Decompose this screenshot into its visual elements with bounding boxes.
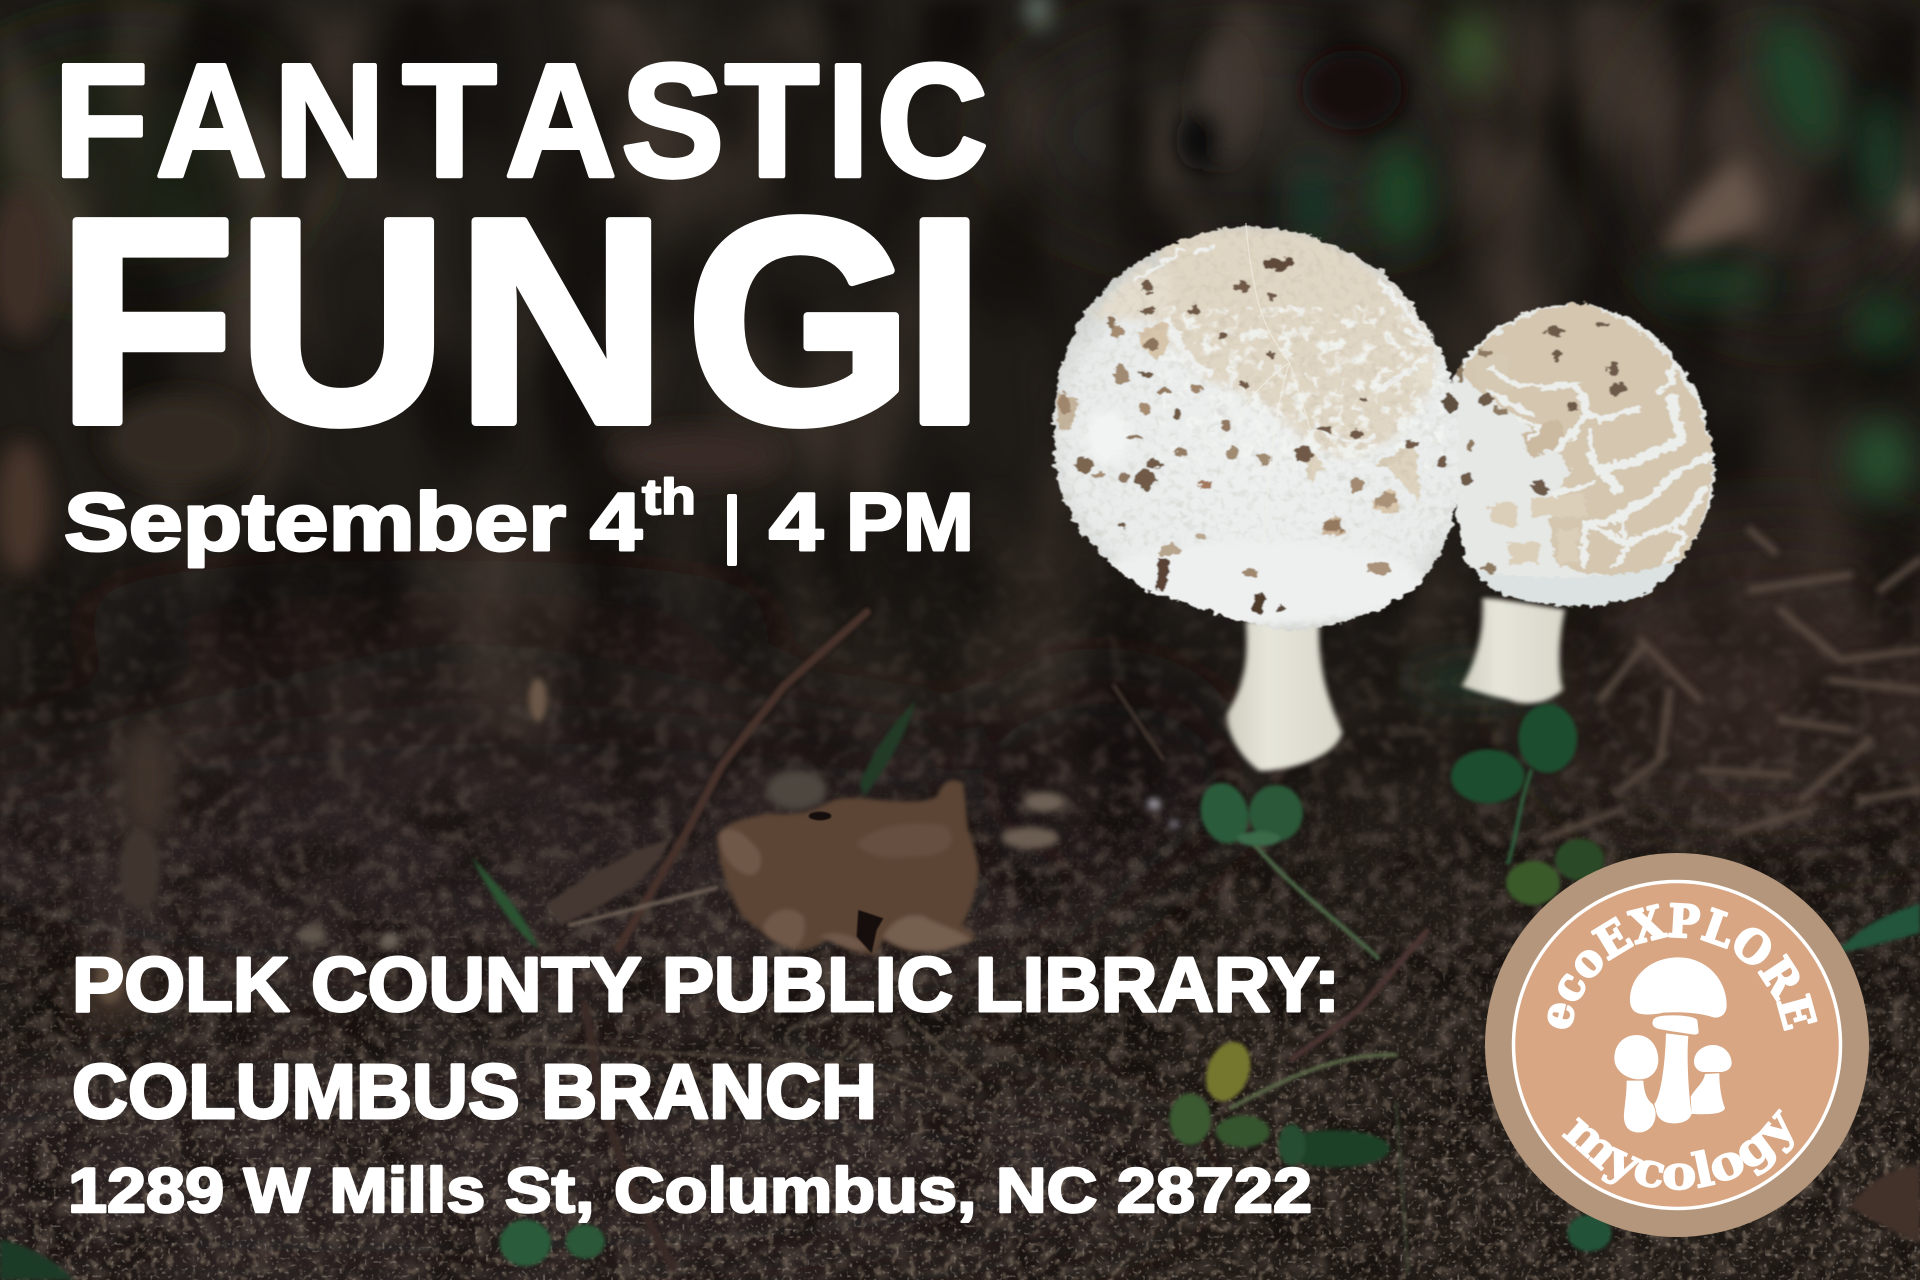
date and time: 4 [590,477,642,568]
date and time: PM [846,477,974,568]
white fibre on the big cap [1232,223,1310,544]
title: FANTASTIC: FANTASTIC [54,31,988,211]
venue name: POLK COUNTY PUBLIC LIBRARY: [72,942,1340,1028]
big mushroom stem [1227,621,1342,771]
icon: three mushrooms [1614,957,1732,1133]
date and time: September [64,477,566,568]
venue name: COLUMBUS BRANCH [72,1049,877,1135]
soil texture [0,591,1920,1280]
badge inner disc [1514,882,1840,1208]
small mushroom cap [1450,300,1718,609]
badge outer ring [1485,853,1869,1237]
dry leaf beside the twig [548,838,670,925]
venue name [72,942,1340,1135]
badge curved text: mycology: mycology [1562,1108,1794,1190]
fallen oak leaf [717,770,979,955]
date and time: th [642,469,696,525]
street address: 1289 W Mills St, Columbus, NC 28722 [68,1156,1312,1226]
big mushroom cap [1044,219,1466,636]
badge: ecoEXPLORE mycology [1485,853,1869,1237]
badge curved text: ecoEXPLORE: ecoEXPLORE [1547,902,1818,1031]
photo subject: two white mushrooms [1044,219,1723,771]
date and time [64,469,974,568]
small mushroom stem [1462,598,1565,703]
blurred green grass in the background [1292,8,1912,694]
upper streaky out-of-focus texture [0,0,1920,780]
twigs, needles and stems [490,612,1531,1273]
blurred fallen leaves in the background [0,0,1920,1022]
pine needles to the right [1540,530,1920,840]
small pebbles [96,678,1179,1004]
date and time: 4 [769,477,823,568]
grass blades and clover leaves [0,700,1920,1280]
title: FUNGI: FUNGI [57,158,985,484]
